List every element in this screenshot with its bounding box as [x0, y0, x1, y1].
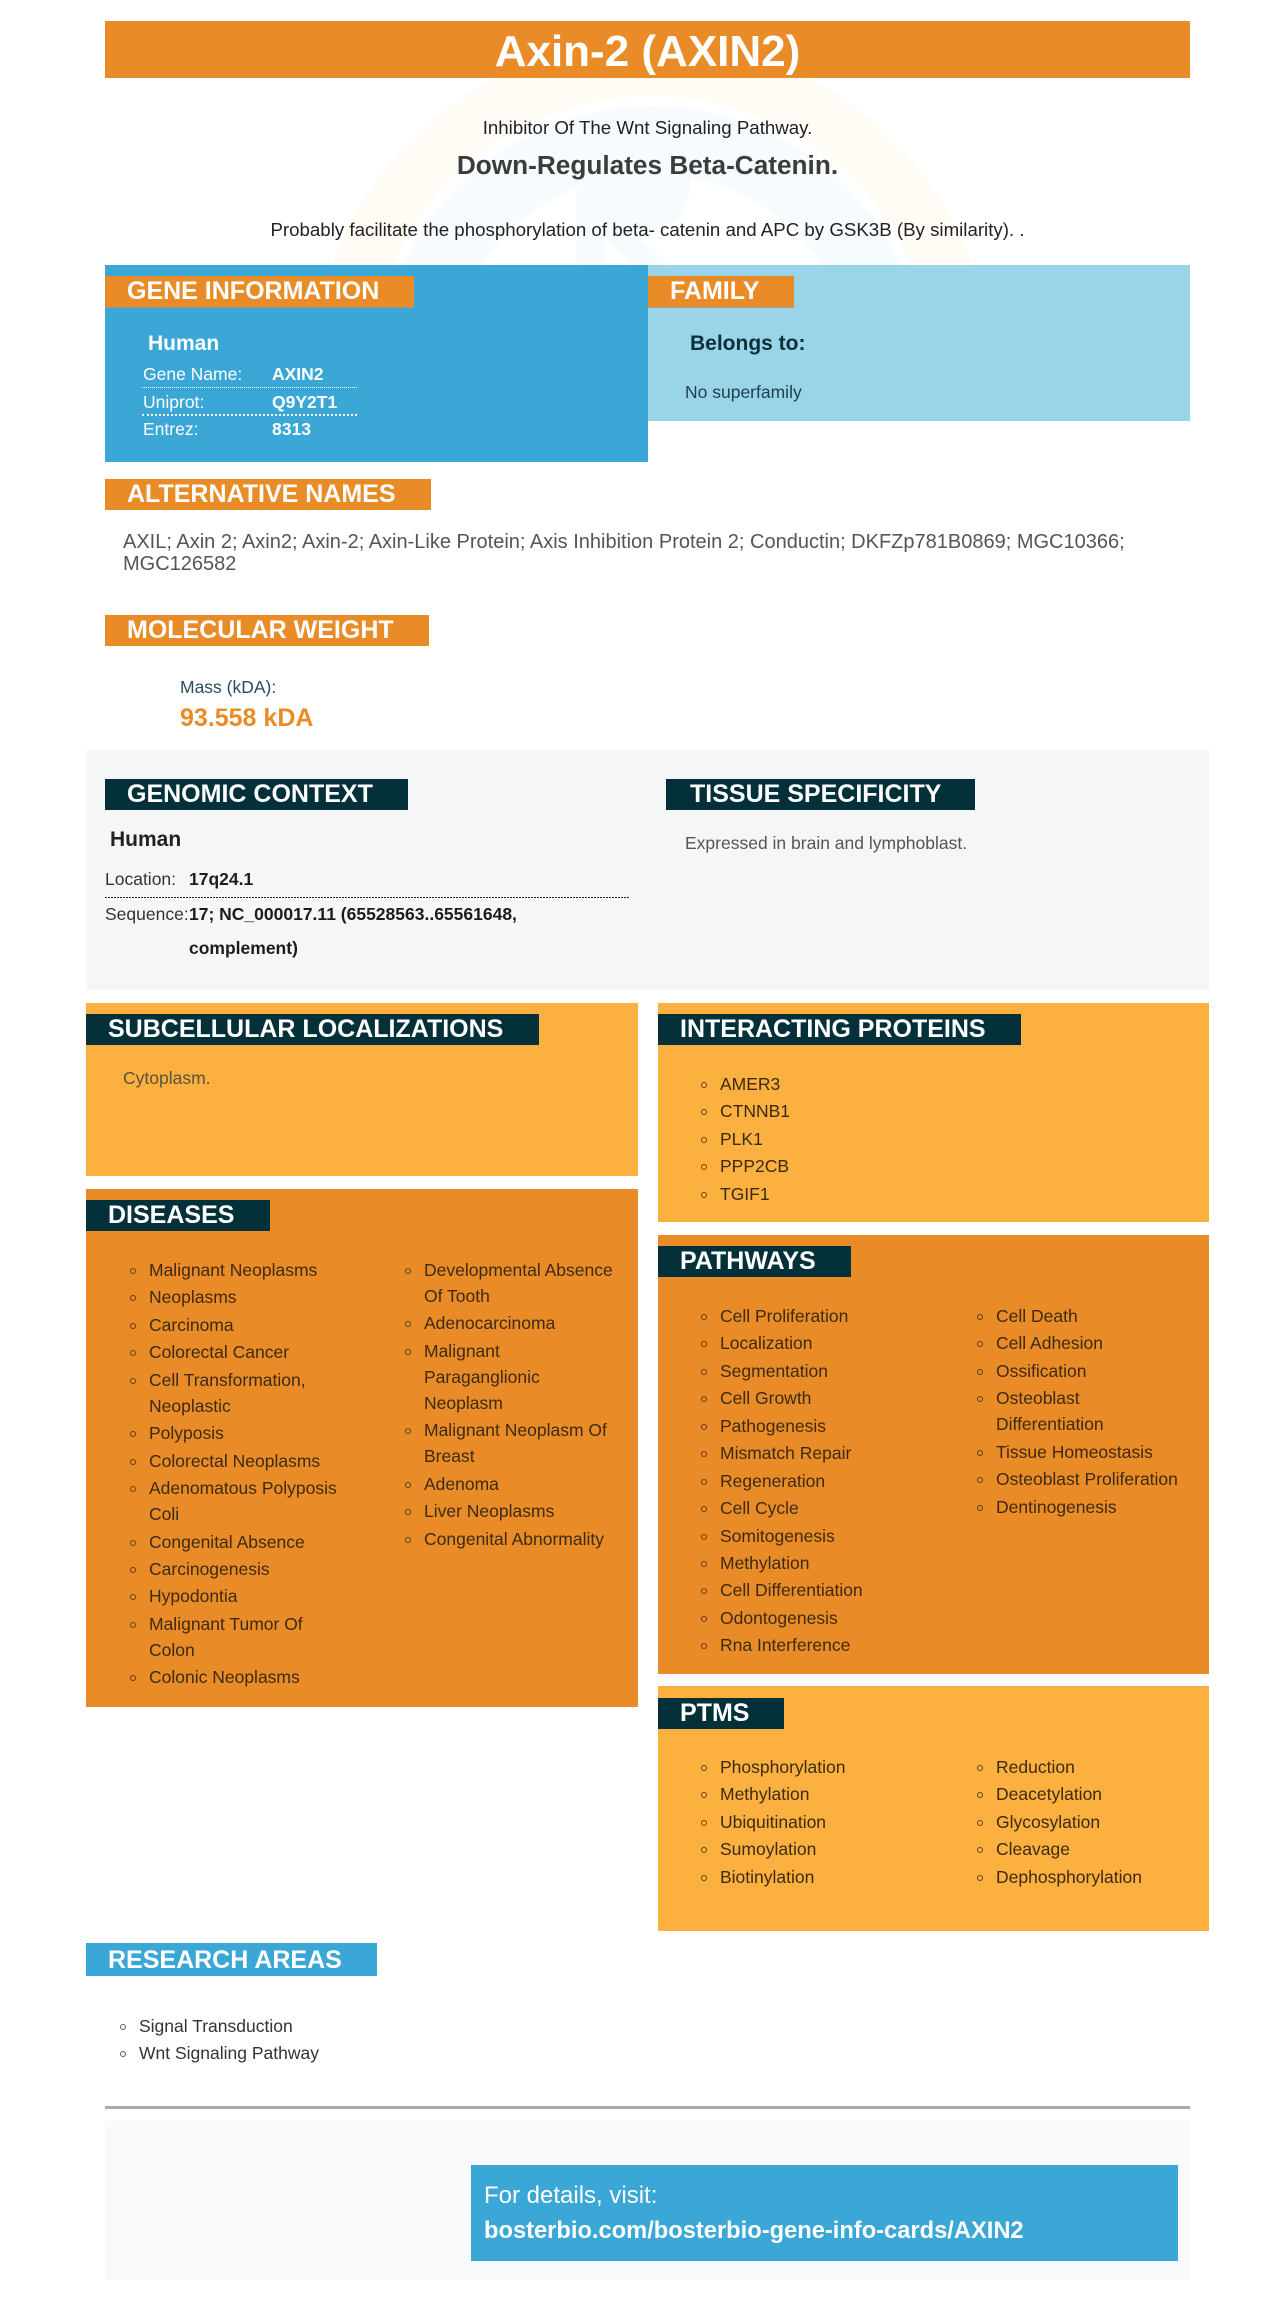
- protein list: TGIF1: [720, 1184, 770, 1204]
- heading: gene information: GENE INFORMATION: [127, 277, 379, 305]
- pathway list column 2: Ossification: [996, 1361, 1086, 1381]
- disease list column 2: Malignant: [424, 1341, 500, 1361]
- disease list column 1: [130, 1260, 337, 1687]
- title: [105, 21, 1190, 78]
- url: bosterbio.com/bosterbio-gene-info-cards/AXIN2: [484, 2218, 1024, 2244]
- disease list column 1: Hypodontia: [149, 1586, 238, 1606]
- disease list column 1: Colonic Neoplasms: [149, 1667, 300, 1687]
- ptm list column 1: Biotinylation: [720, 1867, 814, 1887]
- protein list: PLK1: [720, 1129, 763, 1149]
- mass label: Mass (kDA):: [180, 677, 276, 697]
- subheading: Down-Regulates Beta-Catenin.: [457, 150, 838, 180]
- sequence row: Sequence:: [105, 904, 189, 924]
- pathway list column 1: Segmentation: [720, 1361, 828, 1381]
- pathway list column 1: [701, 1306, 863, 1655]
- gene name row: AXIN2: [272, 364, 324, 384]
- alternative names text: MGC126582: [123, 553, 236, 575]
- ptm list column 1: Sumoylation: [720, 1839, 816, 1859]
- description: Probably facilitate the phosphorylation of beta- catenin and APC by GSK3B (By similarity). .: [270, 219, 1025, 240]
- subtitle: Inhibitor Of The Wnt Signaling Pathway.: [483, 117, 812, 138]
- disease list column 1: Colorectal Cancer: [149, 1342, 289, 1362]
- uniprot row: [143, 392, 337, 412]
- protein list: AMER3: [720, 1074, 780, 1094]
- entrez row: 8313: [272, 419, 311, 439]
- disease list column 1: Colorectal Neoplasms: [149, 1451, 320, 1471]
- research areas list: [120, 2016, 319, 2063]
- pathway list column 2: Tissue Homeostasis: [996, 1442, 1153, 1462]
- family value: No superfamily: [685, 382, 802, 402]
- localization text: Cytoplasm.: [123, 1068, 211, 1088]
- pathway list column 2: Cell Death: [996, 1306, 1078, 1326]
- disease list column 2: Adenoma: [424, 1474, 499, 1494]
- disease list column 1: Malignant Neoplasms: [149, 1260, 317, 1280]
- gene name row: [143, 364, 324, 384]
- pathway list column 1: Odontogenesis: [720, 1608, 838, 1628]
- ptm list column 2: Dephosphorylation: [996, 1867, 1142, 1887]
- pathway list column 2: Osteoblast: [996, 1388, 1080, 1408]
- heading: genomic context: GENOMIC CONTEXT: [127, 780, 373, 808]
- sequence row: complement): [189, 938, 298, 958]
- location row: 17q24.1: [189, 869, 253, 889]
- heading: ptms: [658, 1698, 784, 1729]
- disease list column 2: Breast: [424, 1446, 475, 1466]
- pathway list column 2: Osteoblast Proliferation: [996, 1469, 1178, 1489]
- ptm list column 1: Ubiquitination: [720, 1812, 826, 1832]
- pathway list column 2: [977, 1306, 1178, 1517]
- heading: diseases: [86, 1200, 270, 1231]
- uniprot row: Uniprot:: [143, 392, 204, 412]
- footer panel: [105, 2121, 1190, 2280]
- disease list column 1: Coli: [149, 1504, 179, 1524]
- disease list column 1: Colon: [149, 1640, 195, 1660]
- species label: Human: [110, 828, 181, 851]
- heading: tissue specificity: TISSUE SPECIFICITY: [690, 780, 941, 808]
- entrez row: [143, 419, 311, 439]
- pathway list column 2: Dentinogenesis: [996, 1497, 1117, 1517]
- tissue specificity text: Expressed in brain and lymphoblast.: [685, 833, 967, 853]
- disease list column 2: Malignant Neoplasm Of: [424, 1420, 607, 1440]
- call to action label: For details, visit:: [484, 2182, 657, 2209]
- pathway list column 1: Pathogenesis: [720, 1416, 826, 1436]
- pathway list column 1: Cell Proliferation: [720, 1306, 848, 1326]
- pathway list column 1: Cell Cycle: [720, 1498, 799, 1518]
- research areas list: Wnt Signaling Pathway: [139, 2043, 319, 2063]
- pathway list column 1: Regeneration: [720, 1471, 825, 1491]
- title: Axin-2 (AXIN2): [495, 27, 800, 76]
- protein list: CTNNB1: [720, 1101, 790, 1121]
- disease list column 2: Developmental Absence: [424, 1260, 613, 1280]
- disease list column 2: Paraganglionic: [424, 1367, 540, 1387]
- belongs to label: Belongs to:: [690, 332, 806, 355]
- sequence row: [105, 904, 517, 958]
- alternative names text: AXIL; Axin 2; Axin2; Axin-2; Axin-Like Protein; Axis Inhibition Protein 2; Conductin; DKFZp781B0869; MGC10366;: [123, 531, 1125, 553]
- ptm list column 2: Reduction: [996, 1757, 1075, 1777]
- disease list column 1: Neoplastic: [149, 1396, 231, 1416]
- pathway list column 2: Differentiation: [996, 1414, 1104, 1434]
- heading: family: [648, 276, 794, 307]
- panel: family: [648, 265, 1190, 421]
- disease list column 2: Neoplasm: [424, 1393, 503, 1413]
- heading: ptms: PTMS: [680, 1699, 749, 1727]
- heading: family: FAMILY: [670, 277, 759, 305]
- uniprot row: Q9Y2T1: [272, 392, 337, 412]
- disease list column 1: Neoplasms: [149, 1287, 237, 1307]
- watermark logo: [332, 78, 972, 265]
- disease list column 1: Cell Transformation,: [149, 1370, 306, 1390]
- pathway list column 1: Somitogenesis: [720, 1526, 835, 1546]
- research areas list: Signal Transduction: [139, 2016, 293, 2036]
- ptm list column 1: Methylation: [720, 1784, 810, 1804]
- disease list column 1: Adenomatous Polyposis: [149, 1478, 337, 1498]
- panel: subcellular localizations: [86, 1003, 638, 1176]
- heading: research areas: [86, 1943, 377, 1976]
- panel: gene information: [105, 265, 648, 462]
- pathway list column 1: Cell Growth: [720, 1388, 811, 1408]
- pathway list column 1: Cell Differentiation: [720, 1580, 863, 1600]
- heading: pathways: PATHWAYS: [680, 1247, 816, 1275]
- disease list column 2: Of Tooth: [424, 1286, 490, 1306]
- ptm list column 2: [977, 1757, 1142, 1887]
- disease list column 1: Malignant Tumor Of: [149, 1614, 303, 1634]
- location row: Location:: [105, 869, 176, 889]
- call to action box: [471, 2165, 1178, 2261]
- pathway list column 1: Mismatch Repair: [720, 1443, 851, 1463]
- disease list column 1: Polyposis: [149, 1423, 224, 1443]
- entrez row: Entrez:: [143, 419, 198, 439]
- panel: pathways: [658, 1235, 1209, 1674]
- pathway list column 1: Rna Interference: [720, 1635, 850, 1655]
- heading: interacting proteins: INTERACTING PROTEINS: [680, 1015, 986, 1043]
- protein list: PPP2CB: [720, 1156, 789, 1176]
- location row: [105, 869, 253, 889]
- panel: genomic context and tissue specificity: [86, 750, 1209, 990]
- panel: interacting proteins: [658, 1003, 1209, 1222]
- heading: molecular weight: MOLECULAR WEIGHT: [127, 616, 394, 644]
- disease list column 1: Carcinoma: [149, 1315, 234, 1335]
- panel: ptms: [658, 1686, 1209, 1931]
- pathway list column 1: Localization: [720, 1333, 812, 1353]
- panel: diseases: [86, 1189, 638, 1707]
- protein list: [701, 1074, 790, 1204]
- ptm list column 2: Glycosylation: [996, 1812, 1100, 1832]
- sequence row: 17; NC_000017.11 (65528563..65561648,: [189, 904, 517, 924]
- heading: pathways: [658, 1246, 851, 1277]
- heading: research areas: RESEARCH AREAS: [108, 1946, 342, 1974]
- disease list column 1: Carcinogenesis: [149, 1559, 270, 1579]
- disease list column 2: Adenocarcinoma: [424, 1313, 555, 1333]
- pathway list column 1: Methylation: [720, 1553, 810, 1573]
- species label: Human: [148, 332, 219, 355]
- ptm list column 2: Cleavage: [996, 1839, 1070, 1859]
- disease list column 2: [405, 1260, 613, 1549]
- disease list column 1: Congenital Absence: [149, 1532, 305, 1552]
- ptm list column 1: Phosphorylation: [720, 1757, 846, 1777]
- mass value: 93.558 kDA: [180, 704, 313, 732]
- ptm list column 2: Deacetylation: [996, 1784, 1102, 1804]
- disease list column 2: Congenital Abnormality: [424, 1529, 604, 1549]
- disease list column 2: Liver Neoplasms: [424, 1501, 554, 1521]
- pathway list column 2: Cell Adhesion: [996, 1333, 1103, 1353]
- heading: diseases: DISEASES: [108, 1201, 234, 1229]
- heading: subcellular localizations: SUBCELLULAR LOCALIZATIONS: [108, 1015, 503, 1043]
- alternative names text: [123, 531, 1125, 575]
- heading: alternative names: ALTERNATIVE NAMES: [127, 480, 396, 508]
- gene name row: Gene Name:: [143, 364, 242, 384]
- ptm list column 1: [701, 1757, 846, 1887]
